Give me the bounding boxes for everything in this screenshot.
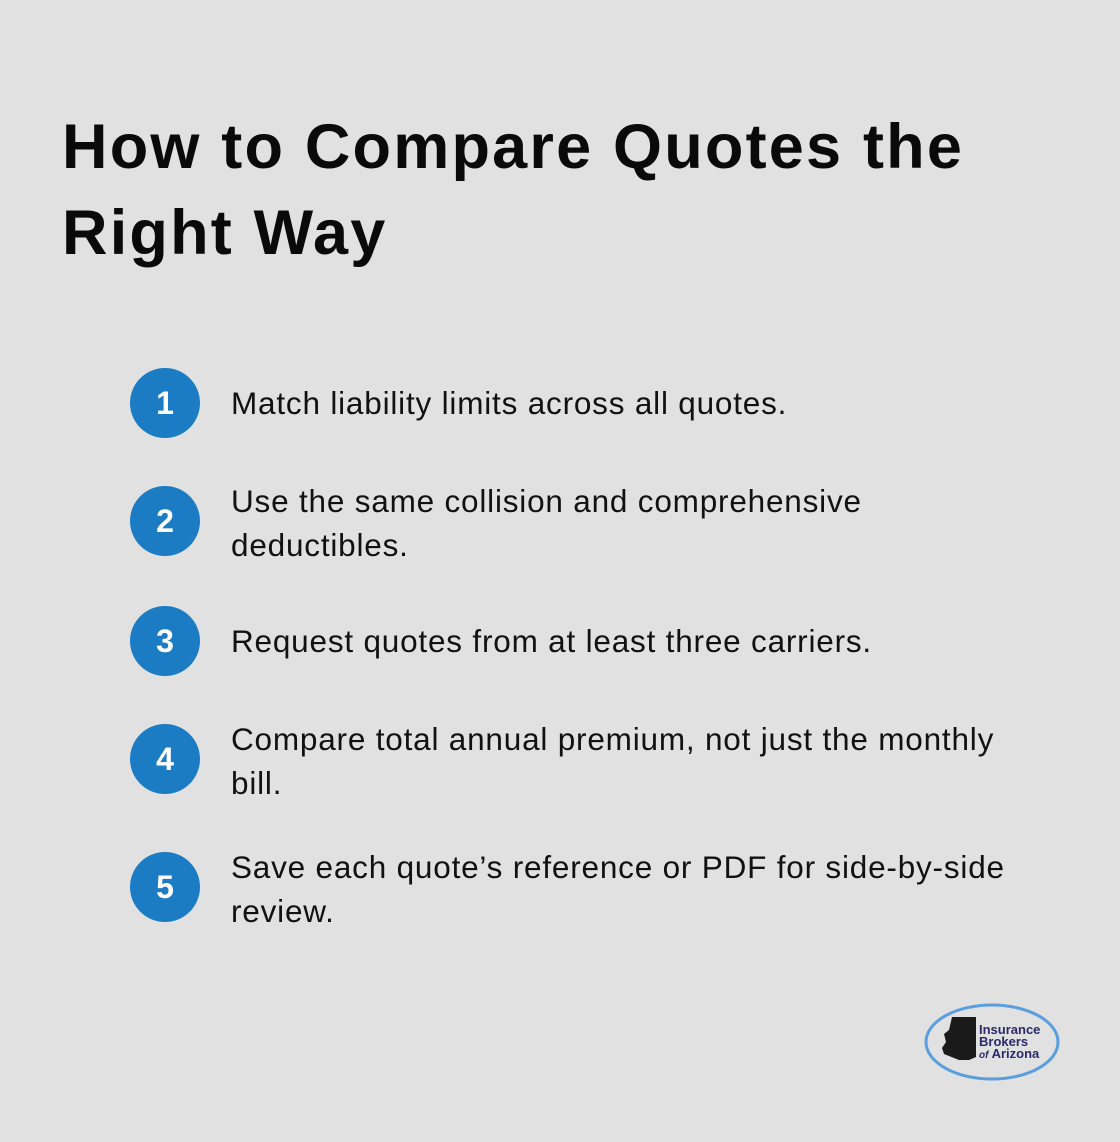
step 4 — [130, 721, 994, 801]
step 2: deductibles. — [231, 527, 409, 563]
step 2: Use the same collision and comprehensive — [231, 483, 862, 519]
title — [62, 112, 964, 268]
step 1: Match liability limits across all quotes. — [231, 385, 787, 421]
logo: Brokers — [979, 1034, 1028, 1049]
step 3 — [130, 606, 872, 676]
step 2: 2 — [156, 503, 174, 539]
step 2 — [130, 483, 862, 563]
step 5: 5 — [156, 869, 174, 905]
step 5: Save each quote’s reference or PDF for side-by-side — [231, 849, 1005, 885]
logo — [924, 1004, 1060, 1080]
title: Right Way — [62, 198, 387, 268]
step 5: review. — [231, 893, 335, 929]
step 4: Compare total annual premium, not just the monthly — [231, 721, 994, 757]
step 3: 3 — [156, 623, 174, 659]
step 4: bill. — [231, 765, 282, 801]
logo: Insurance — [979, 1022, 1040, 1037]
title: How to Compare Quotes the — [62, 112, 964, 182]
step 5 — [130, 849, 1005, 929]
step 3: Request quotes from at least three carriers. — [231, 623, 872, 659]
step 4: 4 — [156, 741, 174, 777]
step 1 — [130, 368, 787, 438]
logo: of Arizona — [979, 1046, 1040, 1061]
step 1: 1 — [156, 385, 174, 421]
